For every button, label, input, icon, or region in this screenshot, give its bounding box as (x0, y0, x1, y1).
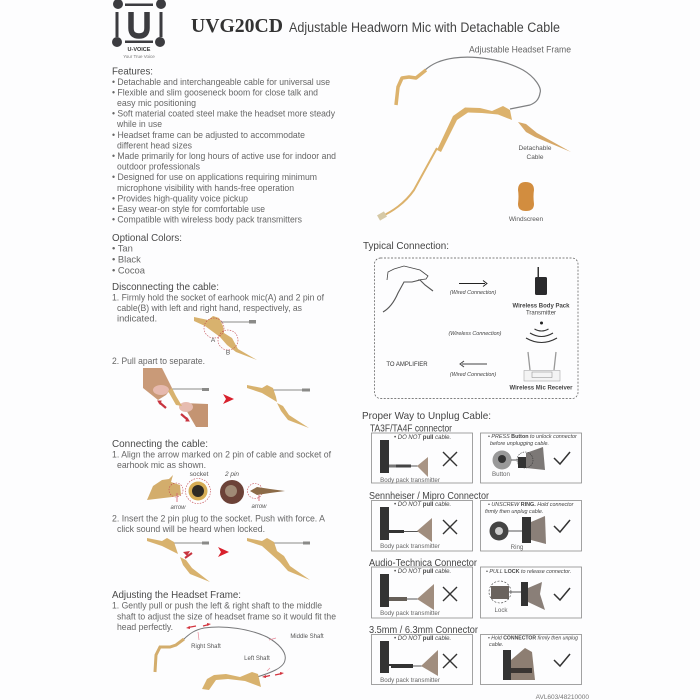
arrow: wired left (460, 361, 487, 367)
heading: Sennheiser: Sennheiser / Mipro Connector (369, 490, 489, 502)
label: wireless connection: (Wireless Connection) (449, 331, 502, 337)
title: Adjustable Headworn Mic with Detachable Cable (289, 20, 560, 35)
step 2 text: 2. Pull apart to separate. (112, 355, 205, 366)
step 1 text: indicated. (117, 312, 157, 324)
diagram: socket and 2 pin alignment: socket (190, 471, 209, 478)
panel: features: • Easy wear-on style for comfortable use (112, 203, 265, 214)
logo: U-Voice: U-VOICE (128, 47, 151, 53)
heading: Audio-Technica: Audio-Technica Connector (369, 557, 477, 569)
panel: hold connector: • Hold CONNECTOR firmly then unplug (488, 636, 578, 642)
panel: features: • Made primarily for long hours of active use for indoor and (112, 150, 336, 161)
icon: wireless mic receiver (524, 352, 560, 381)
icon: windscreen (518, 182, 534, 211)
label: detachable cable: Cable (527, 154, 544, 161)
diagram: socket and 2 pin alignment: 2 pin (224, 471, 239, 478)
step 1 text: 1. Align the arrow marked on 2 pin of cable and socket of (112, 448, 331, 460)
panel: connecting the cable (112, 438, 331, 582)
panel: do not pull (372, 433, 472, 484)
panel: optional colors: • Tan (112, 242, 133, 254)
title (191, 15, 560, 37)
label: wireless body pack transmitter: Wireless Body Pack (513, 304, 570, 310)
panel: do not pull (372, 634, 472, 684)
panel: features: • Provides high-quality voice pickup (112, 192, 248, 204)
panel: hold connector: cable. (489, 642, 503, 648)
label: wireless mic receiver: Wireless Mic Receiver (510, 386, 573, 392)
panel: pull lock: • PULL LOCK to release connector. (486, 569, 571, 575)
panel: adjusting the headset frame (112, 589, 336, 690)
panel: do not pull (372, 567, 472, 618)
diagram: socket A and pin B: B (226, 350, 230, 356)
label: wired connection: (Wired Connection) (450, 372, 496, 378)
logo: U-Voice: Your True Voice (123, 54, 155, 59)
diagram: socket and 2 pin alignment: arrow (251, 504, 267, 510)
panel: features: microphone visibility with hands-free operation (117, 182, 294, 193)
label: detachable cable: Detachable (519, 145, 552, 152)
diagram: headset frame shafts: Right Shaft (191, 644, 221, 650)
icon: body pack transmitter (535, 267, 547, 295)
diagram: headset frame shafts: Middle Shaft (290, 634, 324, 640)
section: 3.5mm / 6.3mm connector (369, 624, 582, 684)
mic: detachable cable (518, 122, 571, 152)
panel: do not pull: • DO NOT pull cable. (394, 502, 451, 508)
panel: do not pull: Body pack transmitter (380, 543, 440, 550)
icon: wireless waves (526, 322, 557, 342)
panel: press button: Button (492, 471, 511, 478)
panel: press button: before unplugging cable. (490, 441, 549, 447)
panel: typical connection (363, 240, 578, 398)
instructions: head perfectly. (117, 621, 173, 632)
diagram: socket A and pin B: A (211, 337, 216, 344)
arrow: red chevron (218, 547, 229, 557)
step 1 text: earhook mic as shown. (117, 459, 206, 470)
arrow: red chevron (223, 394, 234, 404)
section: Audio-Technica connector (369, 557, 582, 618)
diagram: separated mic and cable (247, 385, 310, 428)
section: Sennheiser / Mipro connector (369, 490, 582, 551)
panel: do not pull: • DO NOT pull cable. (394, 569, 451, 575)
label: wireless body pack transmitter (513, 304, 570, 316)
diagram: inserting plug (147, 538, 210, 582)
panel: features: • Designed for use on applications requiring minimum (112, 171, 317, 182)
instructions: shaft to adjust the size of headset frame so it would fit the (117, 610, 336, 622)
panel: press button (480, 433, 582, 483)
instructions: 1. Gently pull or push the left & right shaft to the middle (112, 600, 322, 610)
panel: do not pull: Body pack transmitter (380, 610, 440, 617)
instructions (112, 600, 336, 632)
panel: main product image (377, 44, 571, 223)
heading: proper way: Proper Way to Unplug Cable: (362, 410, 491, 422)
panel: optional colors (112, 232, 182, 276)
label: to amplifier: TO AMPLIFIER (386, 362, 428, 368)
panel: do not pull: Body pack transmitter (380, 477, 440, 484)
heading: adjusting: Adjusting the Headset Frame: (112, 589, 241, 601)
dashed container (374, 258, 578, 398)
panel: do not pull: Body pack transmitter (380, 677, 440, 684)
label: detachable cable (519, 145, 552, 161)
panel: hold connector (480, 634, 582, 684)
heading: TA3F: TA3F/TA4F connector (370, 422, 452, 434)
panel: unscrew ring: • UNSCREW RING. Hold connector (488, 502, 574, 508)
step 1 text: 1. Firmly hold the socket of earhook mic(A) and 2 pin of (112, 292, 324, 302)
panel: unscrew ring (480, 500, 582, 551)
panel: features: Features: (112, 66, 153, 78)
diagram: headset frame shafts: Left Shaft (244, 656, 270, 662)
step 2 text: click sound will be heard when locked. (117, 523, 265, 534)
step 1 text: cable(B) with left and right hand, respectively, as (117, 302, 302, 313)
heading: disconnecting: Disconnecting the cable: (112, 281, 219, 293)
title: UVG20CD (191, 15, 283, 37)
mic: left ear hook (396, 70, 426, 105)
icon: small headset (383, 266, 433, 312)
panel: features: different head sizes (117, 140, 192, 150)
step 2 text: 2. Insert the 2 pin plug to the socket. Push with force. A (112, 512, 326, 524)
panel: pull lock: Lock (494, 607, 508, 614)
diagram: socket A and pin B (194, 316, 257, 360)
panel: optional colors: • Black (112, 254, 141, 264)
step 1 text (112, 448, 331, 470)
panel: unscrew ring: Ring (511, 544, 524, 551)
heading: typical connection: Typical Connection: (363, 240, 449, 252)
panel: do not pull: • DO NOT pull cable. (394, 435, 451, 441)
heading: 3.5mm: 3.5mm / 6.3mm Connector (369, 624, 478, 636)
panel: optional colors: Optional Colors: (112, 232, 182, 244)
label: windscreen: Windscreen (509, 216, 544, 223)
panel: features: • Compatible with wireless body pack transmitters (112, 214, 302, 224)
heading: connecting: Connecting the cable: (112, 438, 208, 450)
panel: features: • Headset frame can be adjusted to accommodate (112, 129, 305, 140)
step 2 text (112, 512, 326, 534)
label: wireless body pack transmitter: Transmitter (526, 310, 556, 316)
mic: headset frame wire (425, 57, 540, 109)
panel: do not pull (372, 500, 472, 551)
label: wired connection: (Wired Connection) (450, 290, 496, 296)
panel: features: • Detachable and interchangeable cable for universal use (112, 76, 330, 87)
diagram: socket and 2 pin alignment: arrow (170, 505, 186, 511)
panel: features: outdoor professionals (117, 160, 200, 172)
diagram: socket and 2 pin alignment (147, 471, 285, 511)
label: adjustable headset frame: Adjustable Headset Frame (469, 44, 571, 54)
panel: optional colors: • Cocoa (112, 264, 146, 276)
panel: features: easy mic positioning (117, 97, 196, 108)
panel: features: while in use (116, 118, 162, 129)
panel: proper way to unplug cable (362, 410, 582, 684)
panel: press button: • PRESS Button to unlock connector (488, 434, 577, 440)
panel: pull lock (480, 567, 582, 618)
logo: U-Voice (112, 0, 166, 59)
panel: unscrew ring: firmly then unplug cable. (485, 509, 543, 515)
photo: hands pulling apart (143, 368, 209, 427)
section: TA3F/TA4F connector (370, 422, 582, 484)
panel: do not pull: • DO NOT pull cable. (394, 636, 451, 642)
step 1 text (112, 292, 324, 324)
arrow: wired right (459, 280, 487, 286)
panel: features: • Flexible and slim gooseneck boom for close talk and (112, 86, 318, 98)
panel: disconnecting the cable (112, 281, 324, 428)
diagram: headset frame shafts (155, 623, 324, 690)
mic: boom and right ear hook (377, 106, 512, 221)
diagram: locked plug (247, 538, 310, 580)
panel: features: • Soft material coated steel make the headset more steady (112, 108, 335, 118)
panel: features (112, 66, 336, 224)
